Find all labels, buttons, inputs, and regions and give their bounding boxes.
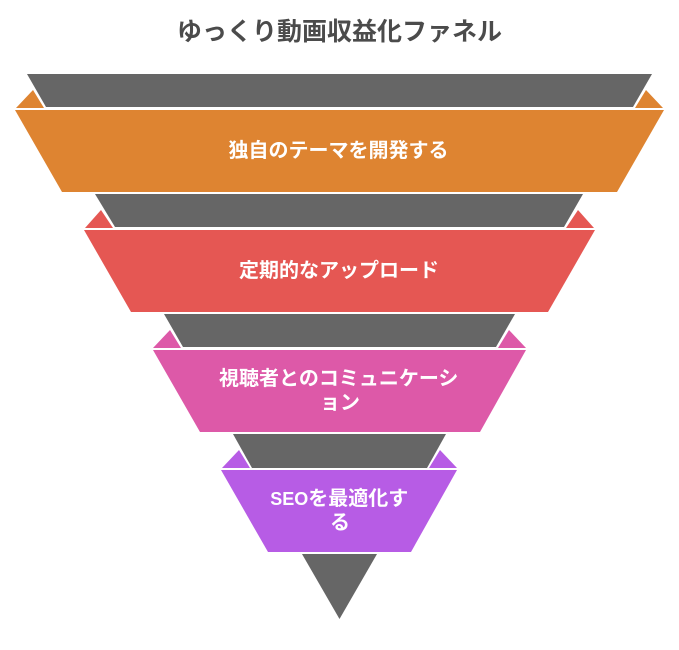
gray funnel wall 3	[164, 314, 515, 347]
orange fold right	[635, 90, 663, 108]
purple band	[221, 470, 457, 552]
red fold left	[85, 210, 113, 228]
orange band label: 独自のテーマを開発する	[228, 139, 448, 162]
red band label: 定期的なアップロード	[239, 259, 439, 282]
funnel segment 1: orange	[15, 74, 664, 192]
orange band	[15, 110, 664, 192]
pink band	[153, 350, 526, 432]
red band	[84, 230, 595, 312]
pink band label: ョン	[320, 392, 360, 414]
funnel segment 2: red	[84, 194, 595, 312]
pink fold left	[153, 330, 181, 348]
title: ゆっくり動画収益化ファネル	[177, 18, 502, 46]
pink band label: 視聴者とのコミュニケーシ	[219, 367, 458, 390]
purple fold right	[429, 450, 457, 468]
funnel segment 3: pink	[153, 314, 526, 432]
red fold right	[566, 210, 594, 228]
gray funnel wall 1	[27, 74, 652, 107]
purple band label: SEOを最適化す	[270, 488, 408, 510]
funnel segment 4: purple	[221, 434, 457, 552]
gray funnel wall 4	[233, 434, 446, 468]
pink fold right	[498, 330, 526, 348]
gray funnel wall 2	[95, 194, 583, 227]
purple fold left	[222, 450, 250, 468]
funnel tip	[302, 554, 377, 619]
purple band label: る	[330, 512, 350, 534]
orange fold left	[16, 90, 44, 108]
